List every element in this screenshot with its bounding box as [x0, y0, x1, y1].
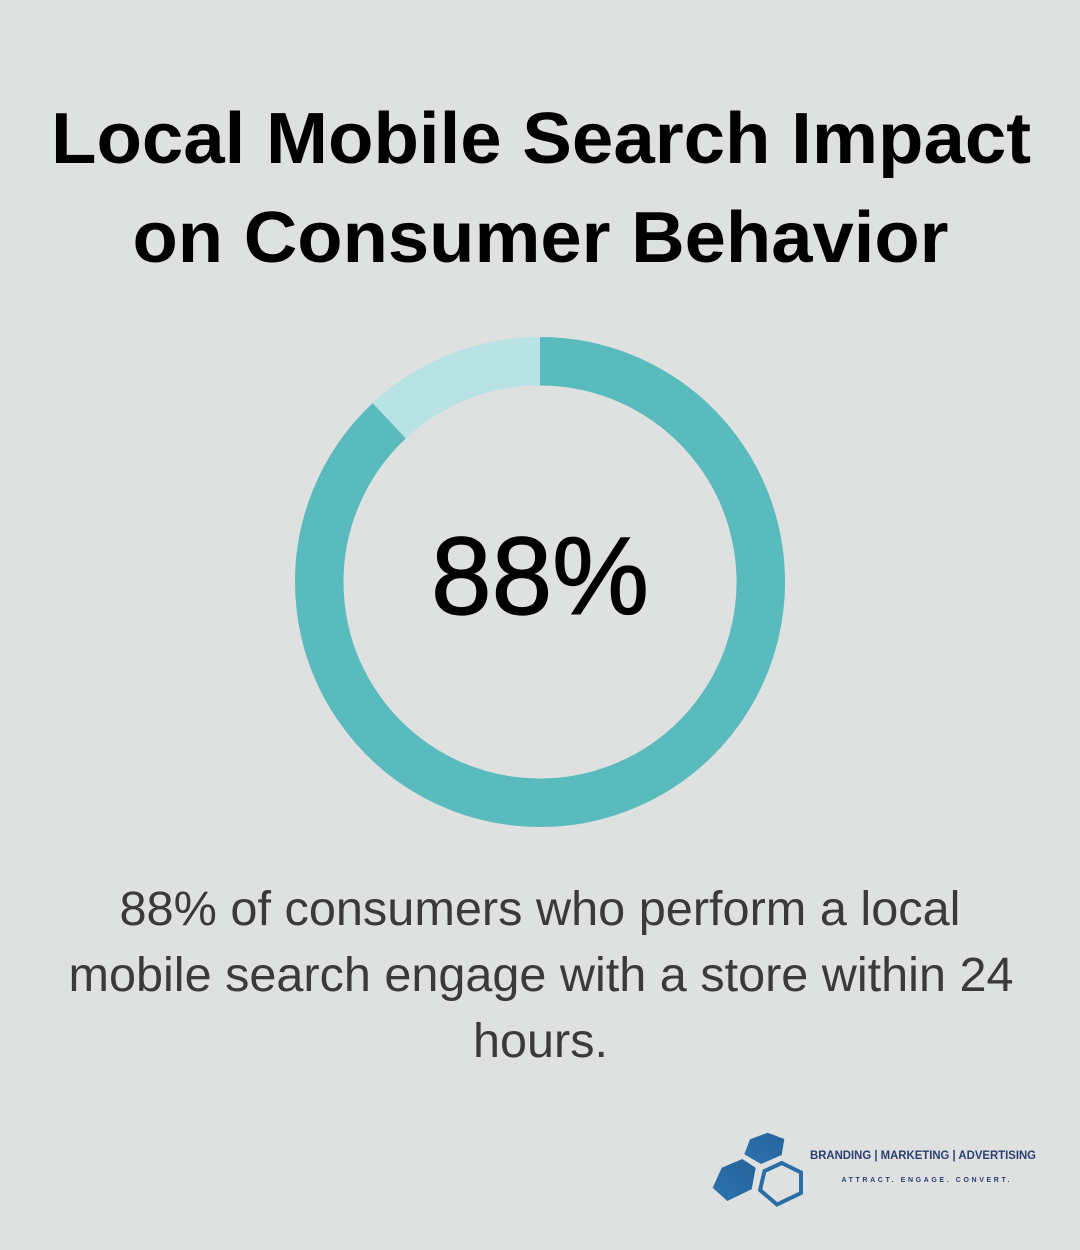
- description text: [68, 883, 1014, 1068]
- logo tagline: slogan: ATTRACT. ENGAGE. CONVERT.: [842, 1177, 1010, 1184]
- donut center value: 88%: [431, 515, 649, 638]
- title: on Consumer Behavior: [132, 198, 948, 278]
- highlighted 88% arc: [319, 361, 761, 803]
- logo tagline: services: BRANDING | MARKETING | ADVERTISING: [810, 1150, 1036, 1162]
- description text: mobile search engage with a store within 24: [68, 949, 1014, 1002]
- donut chart: 88%: [319, 361, 761, 803]
- title: Local Mobile Search Impact: [51, 99, 1031, 179]
- icon: three hexagons: [713, 1133, 801, 1204]
- description text: hours.: [473, 1015, 608, 1068]
- description text: 88% of consumers who perform a local: [120, 883, 960, 936]
- title: [51, 99, 1031, 278]
- logo: [713, 1133, 1036, 1204]
- remaining 12% arc: [389, 361, 540, 421]
